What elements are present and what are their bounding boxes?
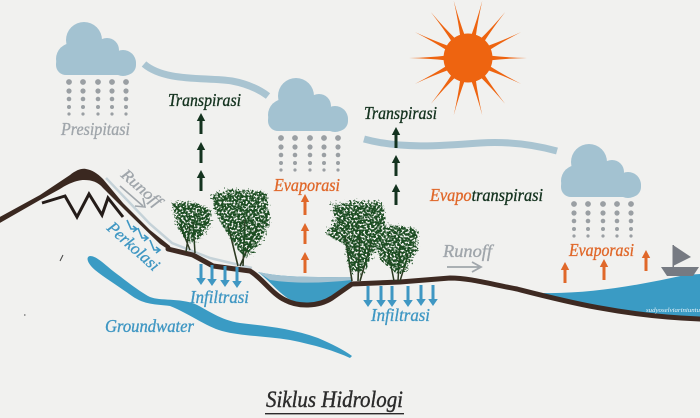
label: Presipitasi: Presipitasi — [60, 119, 130, 139]
arrows: evaporation right — [561, 250, 650, 283]
label: Evaporasi right: Evaporasi — [568, 240, 634, 260]
tree 4 — [377, 226, 417, 281]
arrows: infiltration left — [196, 264, 242, 288]
arrows: evaporation centre — [301, 194, 309, 273]
cloud: right with rain — [561, 144, 641, 238]
tree 1 — [172, 202, 210, 253]
arrows: infiltration right — [363, 285, 438, 307]
arrows: transpiration right — [392, 127, 400, 205]
label: Infiltrasi left: Infiltrasi — [189, 287, 249, 307]
arrow: runoff on slope — [120, 186, 145, 207]
title: Siklus Hidrologi — [266, 387, 403, 412]
label: Groundwater: Groundwater — [105, 316, 195, 336]
tree 3 — [327, 201, 385, 281]
wind stream: right — [364, 139, 557, 151]
watermark: sudyoselviariniuntu — [646, 307, 700, 314]
arrows: percolation — [127, 220, 160, 253]
lake — [258, 272, 352, 304]
label: Transpirasi left: Transpirasi — [168, 90, 241, 110]
arrows: transpiration left — [197, 113, 205, 191]
cloud: left with rain — [56, 22, 136, 116]
runoff film on ground — [106, 178, 252, 268]
sea — [543, 274, 700, 320]
label: Evaporasi centre: Evaporasi — [273, 175, 340, 195]
label: Perkolasi: Perkolasi — [103, 217, 164, 275]
tree 2 — [212, 190, 270, 266]
wind stream: left — [144, 64, 268, 96]
label: Transpirasi right: Transpirasi — [364, 103, 437, 123]
stray marks — [24, 255, 63, 315]
mountain — [0, 169, 172, 252]
groundwater stream — [88, 256, 352, 358]
ground line — [168, 249, 700, 319]
mountain zigzag crack — [42, 194, 123, 217]
arrow: runoff on plain — [447, 262, 481, 272]
label: Evapotranspirasi: Evapotranspirasi — [429, 185, 543, 205]
cloud: centre with rain — [268, 78, 348, 172]
boat — [661, 245, 699, 276]
sun — [409, 0, 527, 116]
label: Infiltrasi right: Infiltrasi — [370, 305, 430, 325]
label: Runoff on plain: Runoff — [442, 241, 495, 261]
label: Runoff on slope: Runoff — [117, 165, 167, 212]
